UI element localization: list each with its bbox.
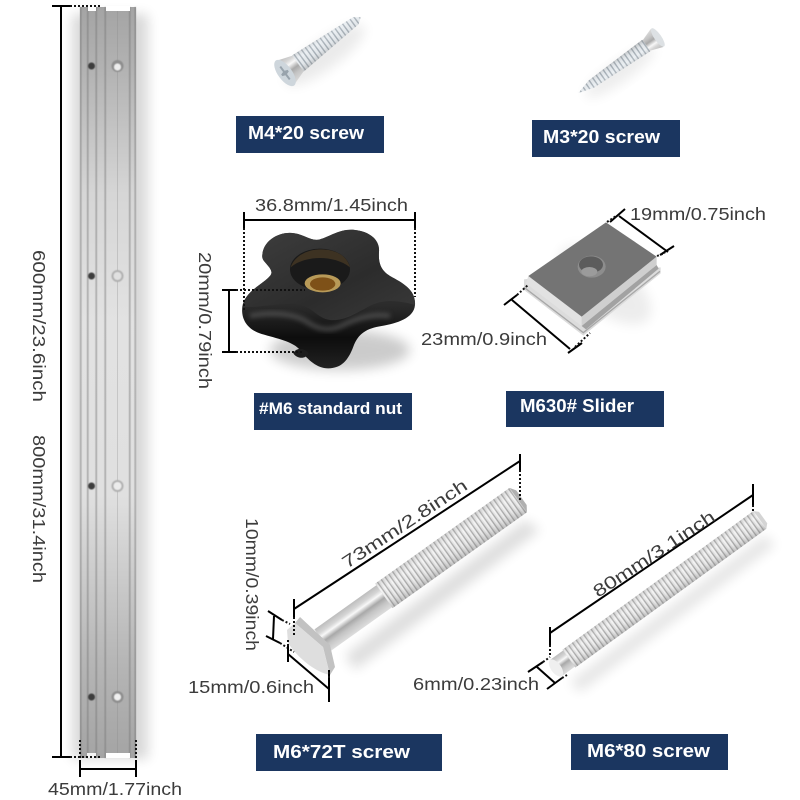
T bolt length label: 73mm/2.8inch <box>338 475 471 572</box>
rail width dimension <box>80 740 136 777</box>
slider label: M630# Slider <box>520 396 634 416</box>
threaded rod length label: 80mm/3.1inch <box>589 506 719 601</box>
threaded rod diameter label: 6mm/0.23inch <box>413 674 539 694</box>
knob width dimension <box>244 212 415 312</box>
rail: aluminium T-track <box>72 6 148 759</box>
T bolt head height label: 10mm/0.39inch <box>242 518 262 651</box>
M3x20 label <box>532 120 680 157</box>
nut label <box>254 393 412 430</box>
rail length label: 800mm: 800mm/31.4inch <box>29 435 49 583</box>
T bolt length dimension <box>294 454 520 636</box>
icon: star knob <box>242 230 415 370</box>
nut label: #M6 standard nut <box>259 400 403 418</box>
T bolt head width label: 15mm/0.6inch <box>188 677 314 697</box>
threaded rod length dimension <box>550 484 753 657</box>
threaded rod diameter dimension <box>528 657 567 689</box>
slider length dimension <box>504 285 590 353</box>
knob height dimension <box>222 290 305 352</box>
T bolt label <box>256 734 442 771</box>
M4x20 label: M4*20 screw <box>248 123 365 143</box>
T bolt head height dimension <box>266 611 294 652</box>
knob width label: 36.8mm/1.45inch <box>255 195 408 215</box>
T bolt head <box>287 617 335 675</box>
slider label <box>506 391 664 427</box>
M4x20 label <box>236 116 384 153</box>
slider width label: 19mm/0.75inch <box>630 204 766 224</box>
icon: M6x72 T bolt <box>287 486 540 675</box>
knob height label: 20mm/0.79inch <box>195 252 215 389</box>
T bolt label: M6*72T screw <box>273 742 411 762</box>
icon: M4x20 screw <box>270 5 372 95</box>
M3x20 label: M3*20 screw <box>543 127 661 147</box>
icon: M6x80 threaded rod <box>545 509 775 692</box>
slider length label: 23mm/0.9inch <box>421 329 547 349</box>
rail holes <box>88 60 124 703</box>
rail length label: 600mm: 600mm/23.6inch <box>29 250 49 402</box>
threaded rod label <box>571 734 728 770</box>
icon: M3x20 screw <box>572 26 667 104</box>
rail length dimension line <box>52 6 100 757</box>
threaded rod label: M6*80 screw <box>587 741 711 761</box>
rail width label: 45mm/1.77inch <box>48 779 182 799</box>
T bolt head width dimension <box>288 640 329 702</box>
icon: slider block <box>524 222 664 339</box>
slider width dimension <box>607 209 674 256</box>
